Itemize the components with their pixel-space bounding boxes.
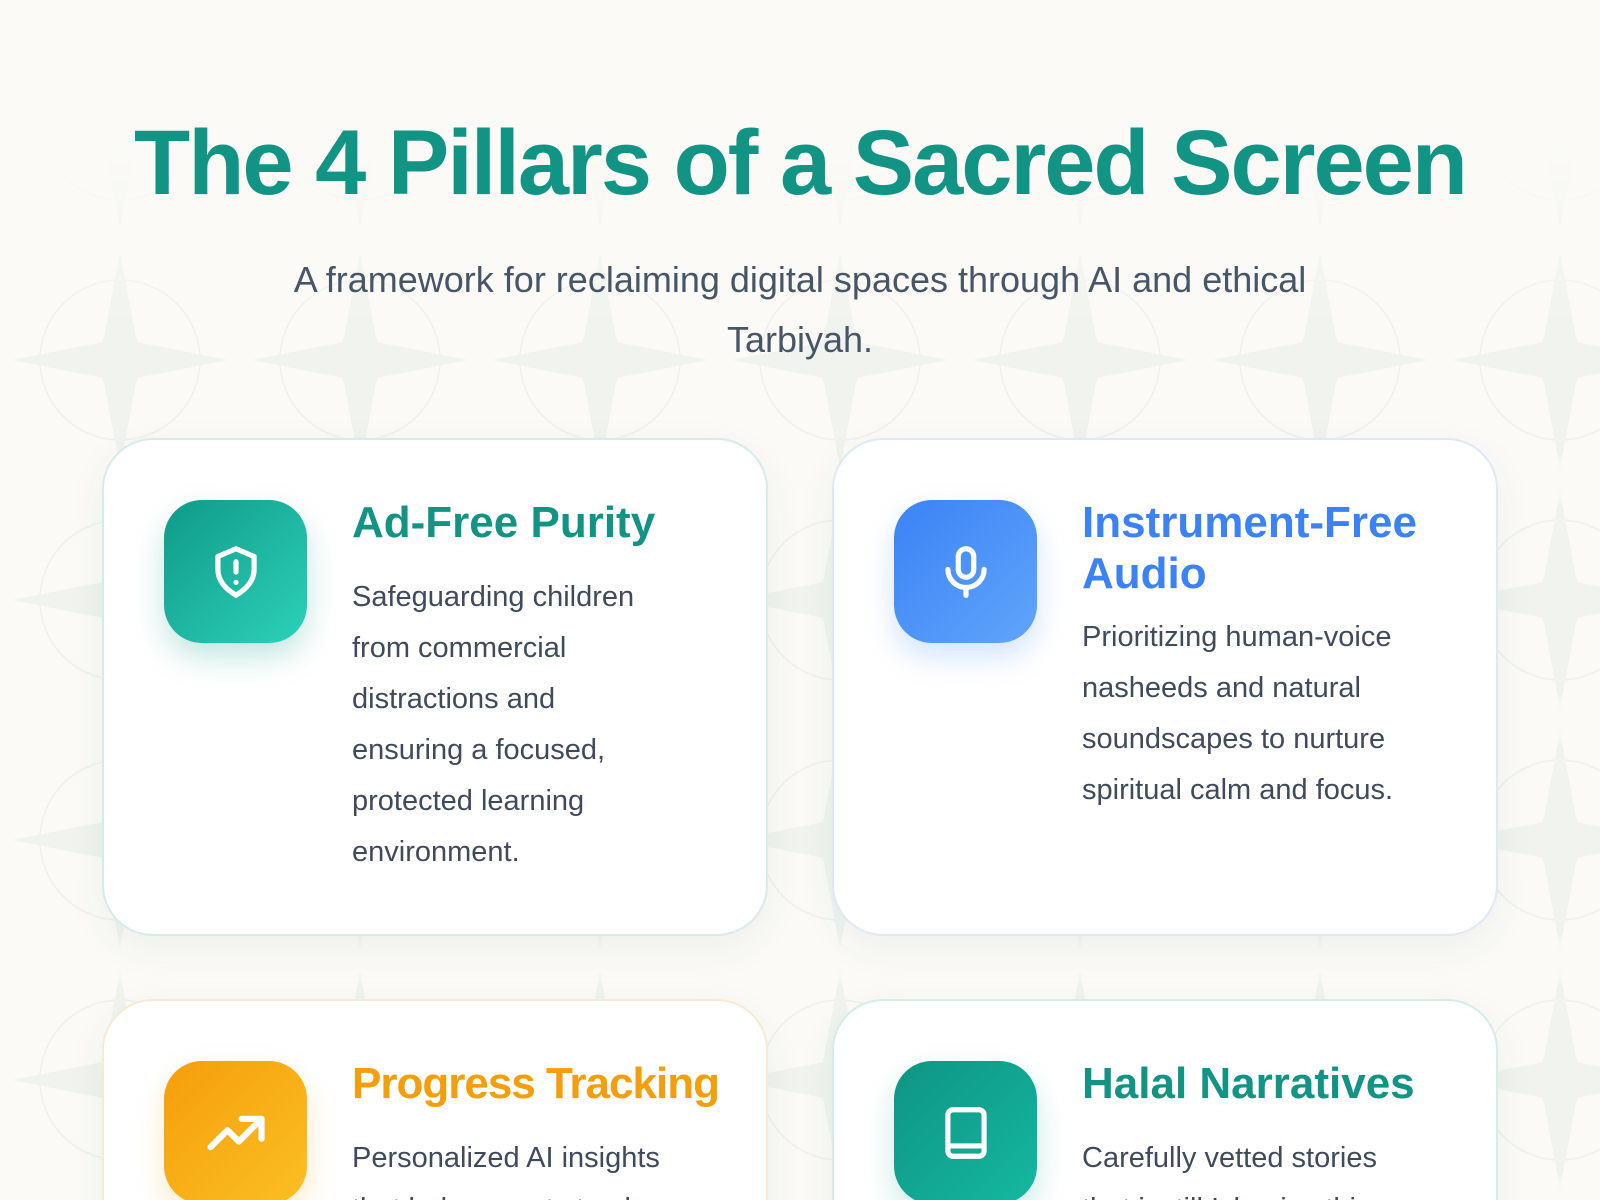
text: halal: Halal Narratives xyxy=(1082,1059,1415,1108)
panel: progress tracking xyxy=(102,999,768,1200)
panel: instrument-free audio xyxy=(832,438,1498,936)
text: audio: Instrument-Free Audio xyxy=(1082,498,1417,598)
icon: shield xyxy=(164,500,307,643)
subtitle: A framework for reclaiming digital spaces through AI and ethical Tarbiyah. xyxy=(294,259,1306,360)
icon: trending up xyxy=(164,1061,307,1200)
text: ad-free: Ad-Free Purity xyxy=(352,498,655,547)
title: The 4 Pillars of a Sacred Screen xyxy=(134,112,1466,214)
text: audio: Prioritizing human-voice nasheeds and natural soundscapes to nurture spiritual calm and focus. xyxy=(1082,621,1393,806)
icon: book xyxy=(894,1061,1037,1200)
text: progress xyxy=(352,1059,719,1200)
text: ad-free: Safeguarding children from commercial distractions and ensuring a focused, protected learning environment. xyxy=(352,581,634,868)
panel: halal narratives xyxy=(832,999,1498,1200)
text: audio xyxy=(1082,498,1417,806)
text: progress: Progress Tracking xyxy=(352,1059,719,1108)
panel: ad-free purity xyxy=(102,438,768,936)
text: halal xyxy=(1082,1059,1415,1200)
icon: microphone xyxy=(894,500,1037,643)
